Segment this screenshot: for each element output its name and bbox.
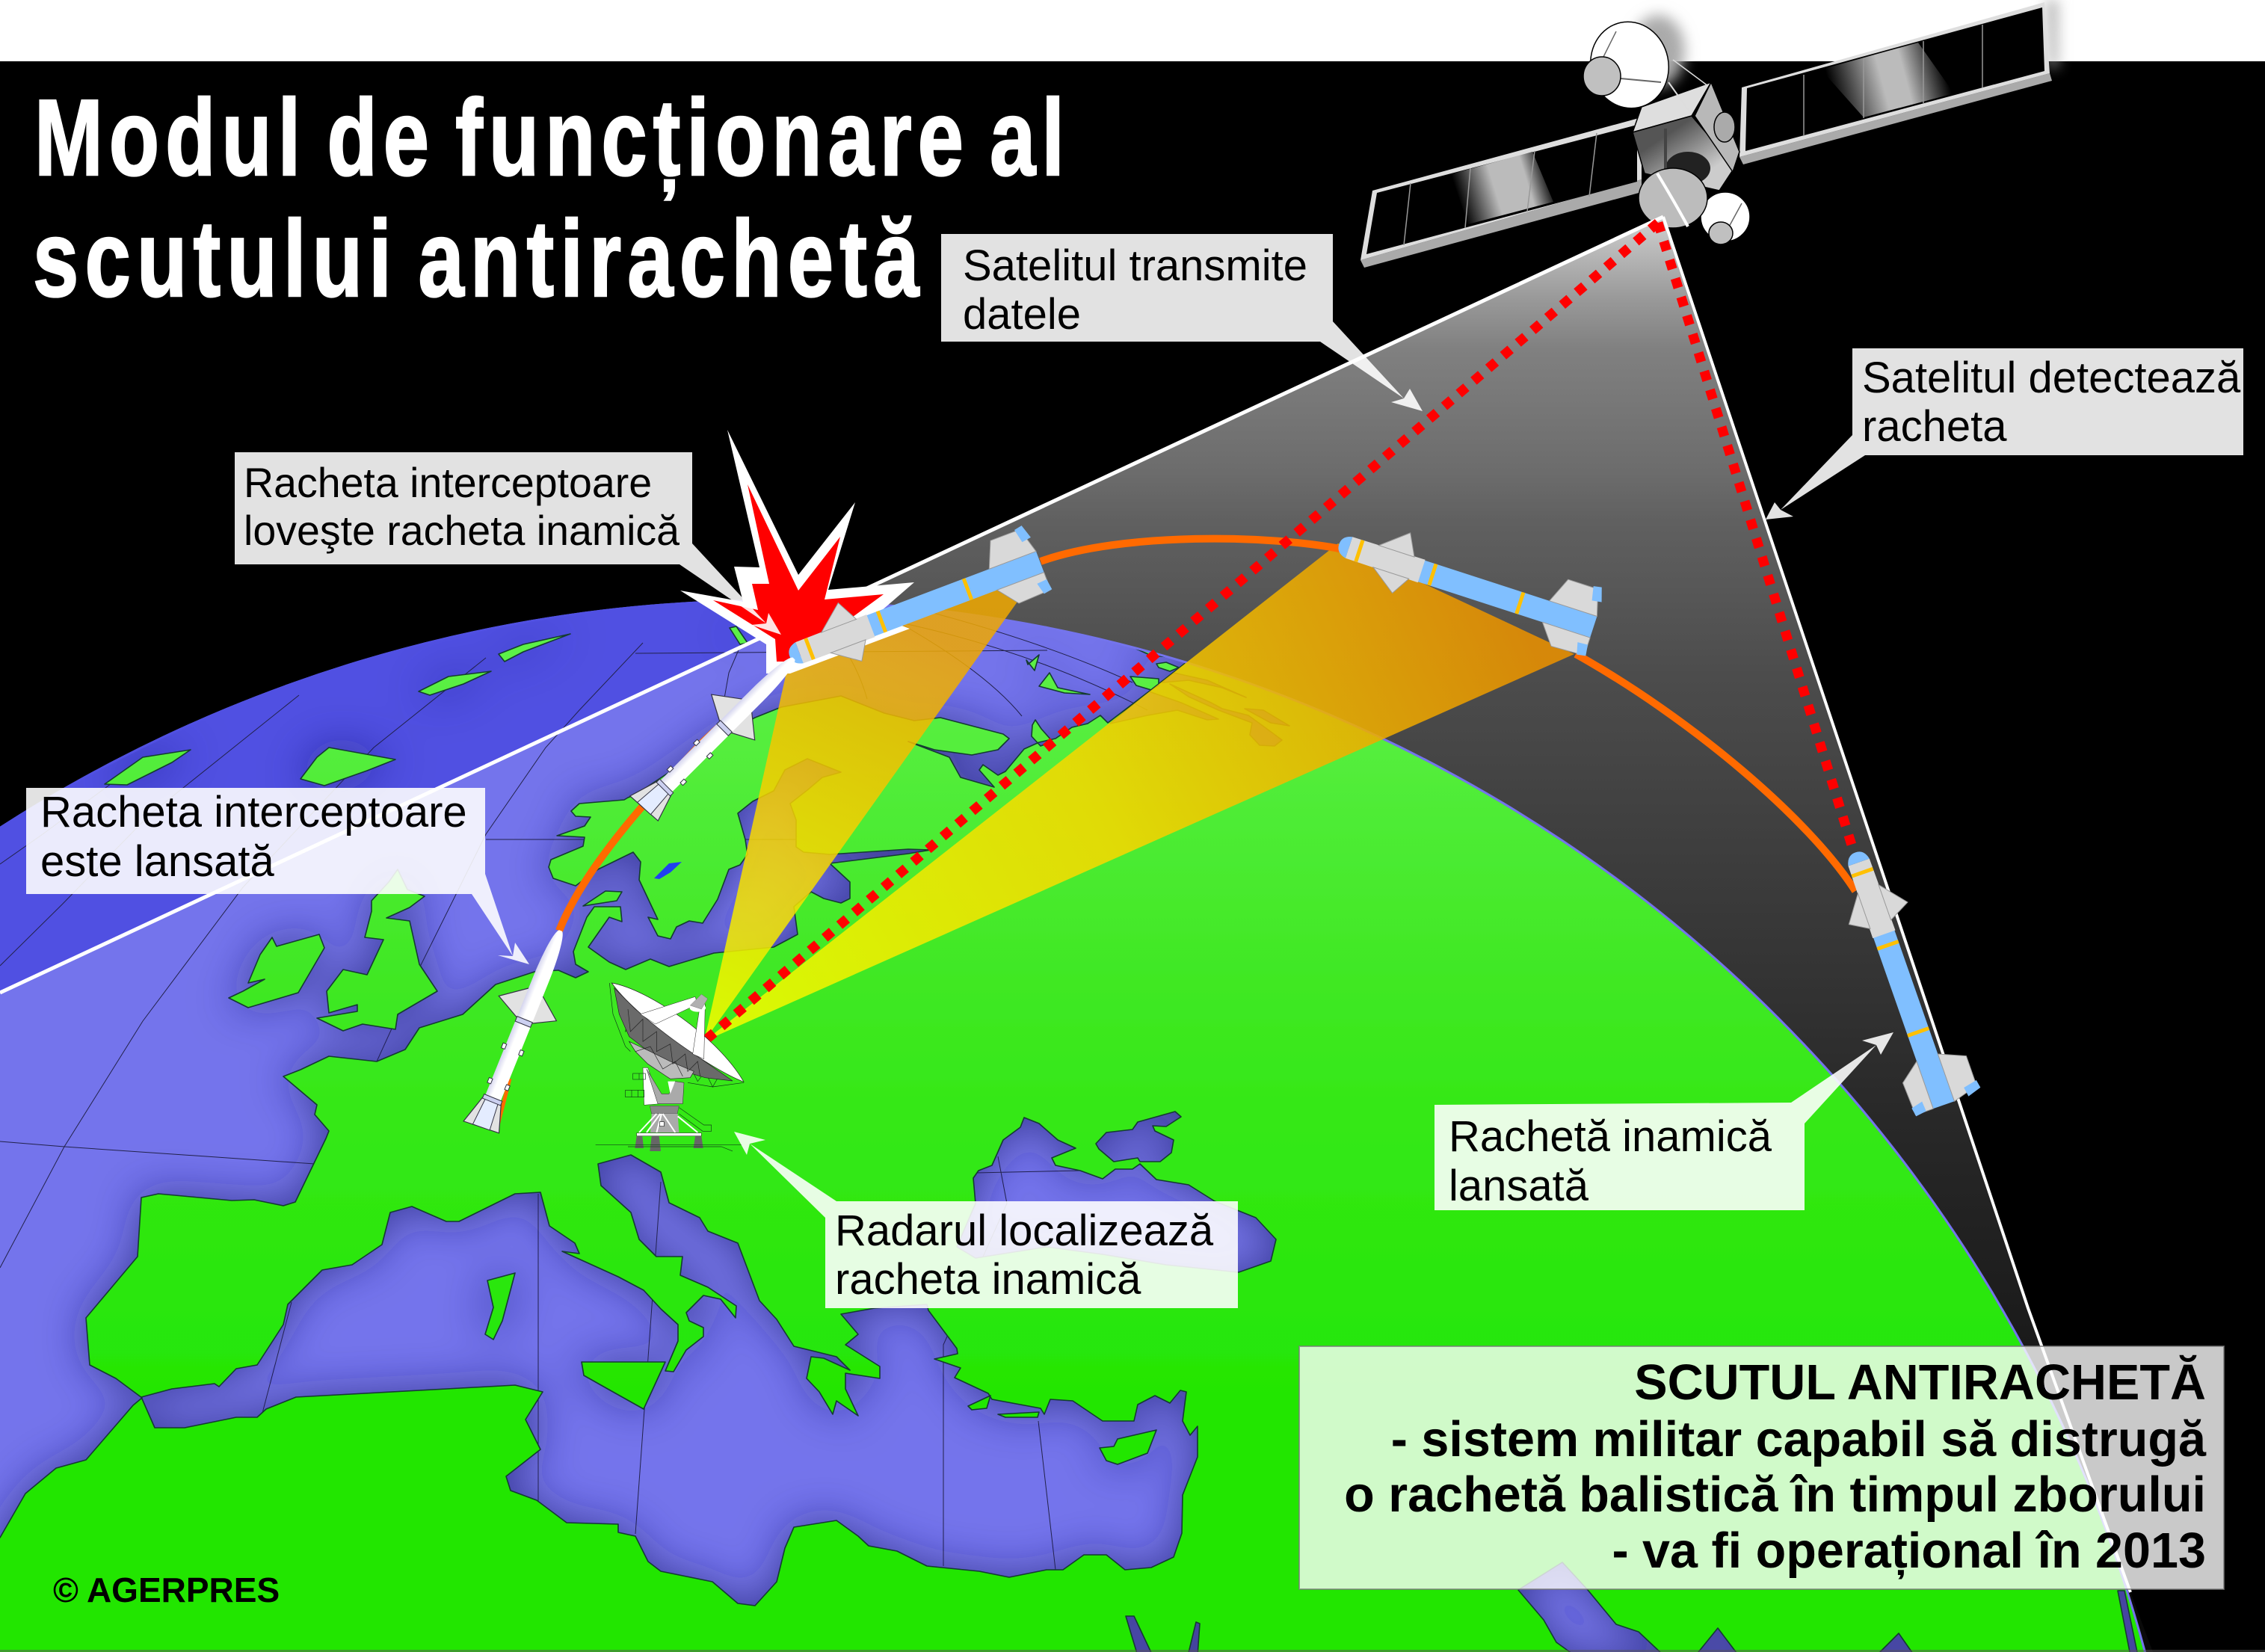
cone left edge line	[0, 217, 1663, 993]
radar dish	[596, 983, 744, 1151]
label: radar locates missile: Radarul localizează	[835, 1206, 1214, 1255]
label: interceptor hits enemy missile: loveşte racheta inamică	[244, 508, 680, 554]
enemy missile mid flight	[1329, 506, 1607, 657]
white top band	[0, 0, 2265, 61]
info box	[1299, 1346, 2224, 1589]
info box: - sistem militar capabil să distrugă	[1391, 1412, 2207, 1467]
cone right edge line	[1663, 217, 2130, 1592]
ocean	[0, 583, 2265, 1652]
info box: - va fi operațional în 2013	[1612, 1523, 2206, 1579]
satellite shadow	[1631, 0, 2057, 87]
interceptor missile lower	[450, 919, 588, 1139]
top dish antenna	[1583, 14, 1677, 116]
satellite	[1360, 0, 2057, 268]
label: radar locates missile	[734, 1132, 1238, 1308]
interceptor missile upper	[620, 635, 815, 830]
label: satellite detects missile: racheta	[1862, 402, 2007, 451]
explosion	[680, 430, 914, 674]
dotted line: satellite to radar	[704, 223, 1658, 1041]
info box: o rachetă balistică în timpul zborului	[1344, 1467, 2206, 1523]
land masses	[0, 598, 2265, 1652]
label: interceptor launched: Racheta interceptoare	[40, 788, 467, 836]
label: interceptor launched	[26, 788, 529, 964]
radar beam: to interceptor target	[704, 579, 1020, 1041]
title line 2: scutului antirachetă	[33, 198, 925, 320]
feed arm	[641, 996, 697, 1024]
interceptor trajectory	[559, 665, 785, 931]
dotted line: satellite to enemy missile	[1658, 223, 1854, 852]
label: satellite transmits data: datele	[963, 290, 1081, 339]
label: interceptor hits enemy missile	[235, 452, 781, 635]
label: satellite transmits data: Satelitul transmite	[963, 241, 1307, 290]
lake	[654, 862, 682, 879]
enemy missile at impact	[775, 523, 1053, 685]
label: interceptor hits enemy missile: Racheta interceptoare	[244, 460, 652, 506]
info box: SCUTUL ANTIRACHETĂ	[1634, 1355, 2206, 1411]
platform	[637, 1133, 701, 1136]
globe	[0, 600, 2146, 1652]
right solar panel	[1739, 2, 2052, 164]
label: enemy missile launched: lansată	[1449, 1162, 1589, 1210]
label: satellite transmits data	[941, 234, 1423, 411]
label: satellite detects missile: Satelitul detectează	[1862, 354, 2241, 402]
satellite body	[1633, 60, 1739, 191]
dish lattice	[609, 983, 744, 1087]
enemy missile launch	[1825, 839, 1982, 1117]
left solar panel	[1360, 117, 1642, 268]
label: enemy missile launched: Rachetă inamică	[1449, 1112, 1772, 1161]
radar beam: to enemy missile	[704, 543, 1574, 1041]
enemy missile trajectory	[1041, 539, 1855, 891]
grid lines	[0, 609, 1147, 1570]
title	[33, 77, 1070, 320]
title line 1: Modul de funcționare al	[34, 77, 1070, 200]
label: radar locates missile: racheta inamică	[835, 1255, 1141, 1304]
copyright: © AGERPRES	[53, 1571, 280, 1609]
pedestal	[643, 1067, 660, 1105]
label: interceptor launched: este lansată	[40, 837, 275, 886]
label: satellite detects missile	[1766, 348, 2243, 520]
lower dish antenna	[1639, 168, 1750, 244]
interceptor exhaust sliver	[496, 1079, 510, 1131]
label: enemy missile launched	[1434, 1032, 1893, 1210]
